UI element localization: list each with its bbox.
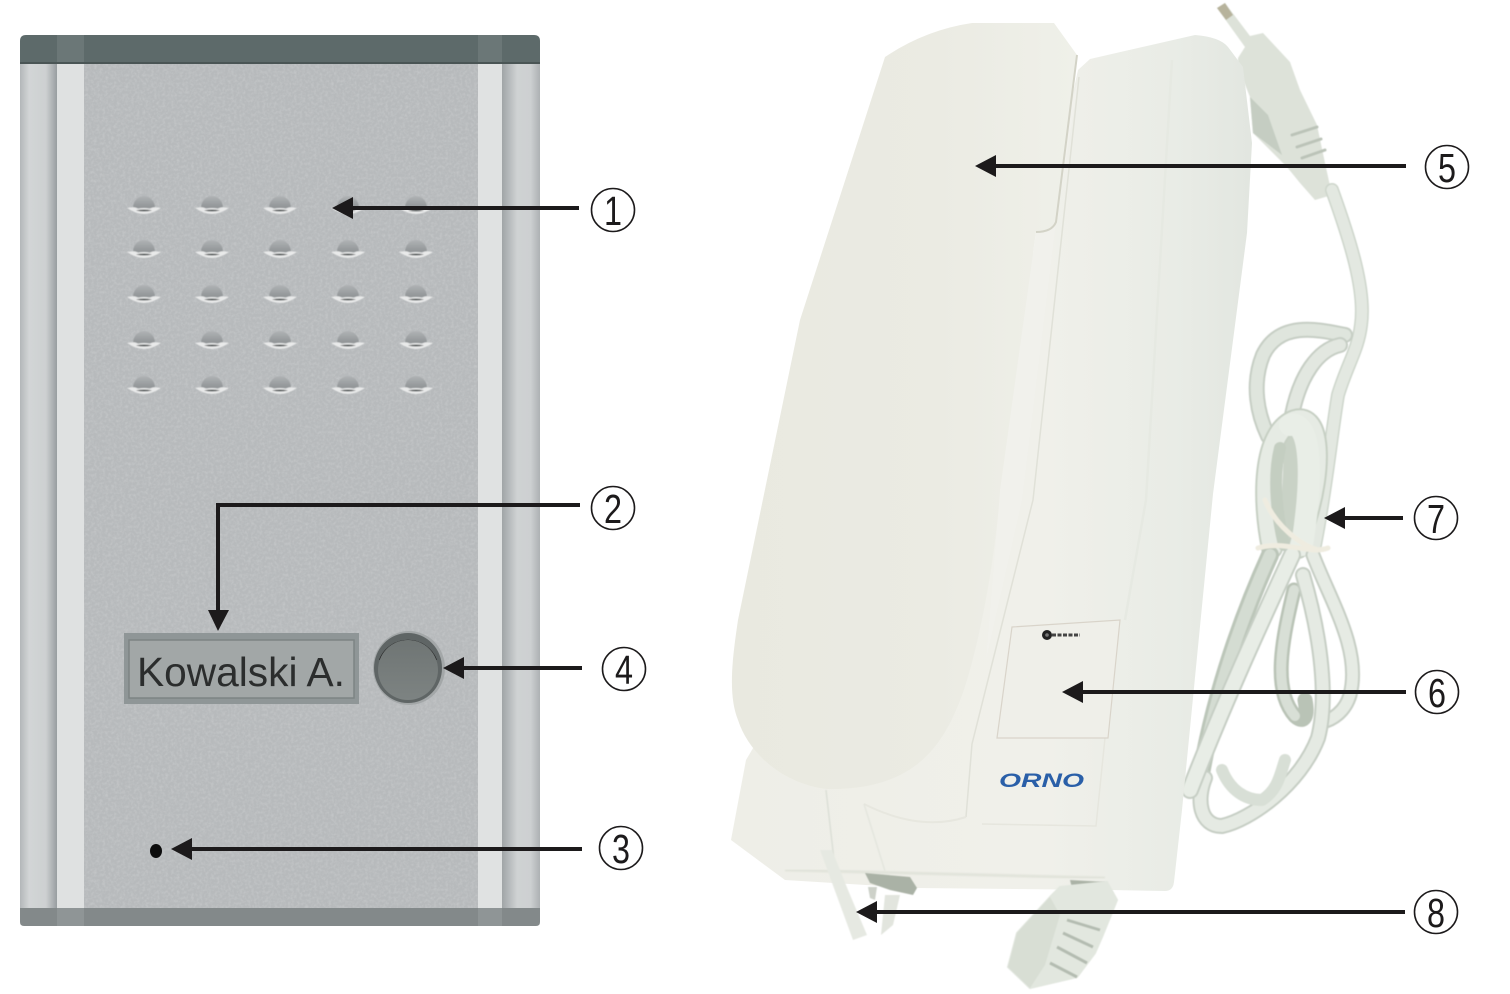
arrow 8 <box>856 901 1405 923</box>
call button <box>373 631 445 705</box>
arrow 2 <box>208 505 580 631</box>
number 1 <box>592 188 634 234</box>
name plate <box>124 633 359 704</box>
number 8: 8 <box>1427 890 1445 936</box>
arrow 1 <box>332 197 579 219</box>
number 6 <box>1416 670 1458 716</box>
number 4 <box>602 647 646 693</box>
base ridge lines <box>785 60 1172 878</box>
panel: door station <box>20 35 540 926</box>
number 6: 6 <box>1428 670 1446 716</box>
arrow 4 <box>443 657 582 679</box>
loop hole shading <box>1280 425 1300 545</box>
power cable and plug <box>1190 3 1362 826</box>
microphone hole <box>150 844 162 858</box>
wire terminals <box>865 873 917 895</box>
number 1: 1 <box>604 188 622 234</box>
coiled cord grommet <box>1008 882 1117 988</box>
number 3: 3 <box>612 826 630 872</box>
number 7: 7 <box>1427 496 1445 542</box>
name plate: Kowalski A. <box>137 649 345 695</box>
number 2 <box>592 486 634 532</box>
number 3 <box>600 826 642 872</box>
arrow 6 <box>1062 681 1406 703</box>
cable tie <box>1258 500 1328 550</box>
key hole panel <box>997 620 1120 738</box>
handset <box>732 23 1077 789</box>
number 8 <box>1414 890 1458 936</box>
arrow 7 <box>1324 507 1403 529</box>
number 5: 5 <box>1438 145 1456 191</box>
number 5 <box>1426 145 1468 191</box>
number 2: 2 <box>604 486 622 532</box>
number 7 <box>1414 496 1458 542</box>
plug <box>1217 3 1332 200</box>
base unit <box>731 35 1252 891</box>
number 4: 4 <box>615 647 633 693</box>
brand logo: ORNO <box>999 771 1084 792</box>
arrow 3 <box>171 838 582 860</box>
icon: key <box>1042 630 1080 640</box>
arrow 5 <box>975 155 1406 177</box>
speaker grille <box>127 196 433 394</box>
wires <box>820 790 1113 940</box>
